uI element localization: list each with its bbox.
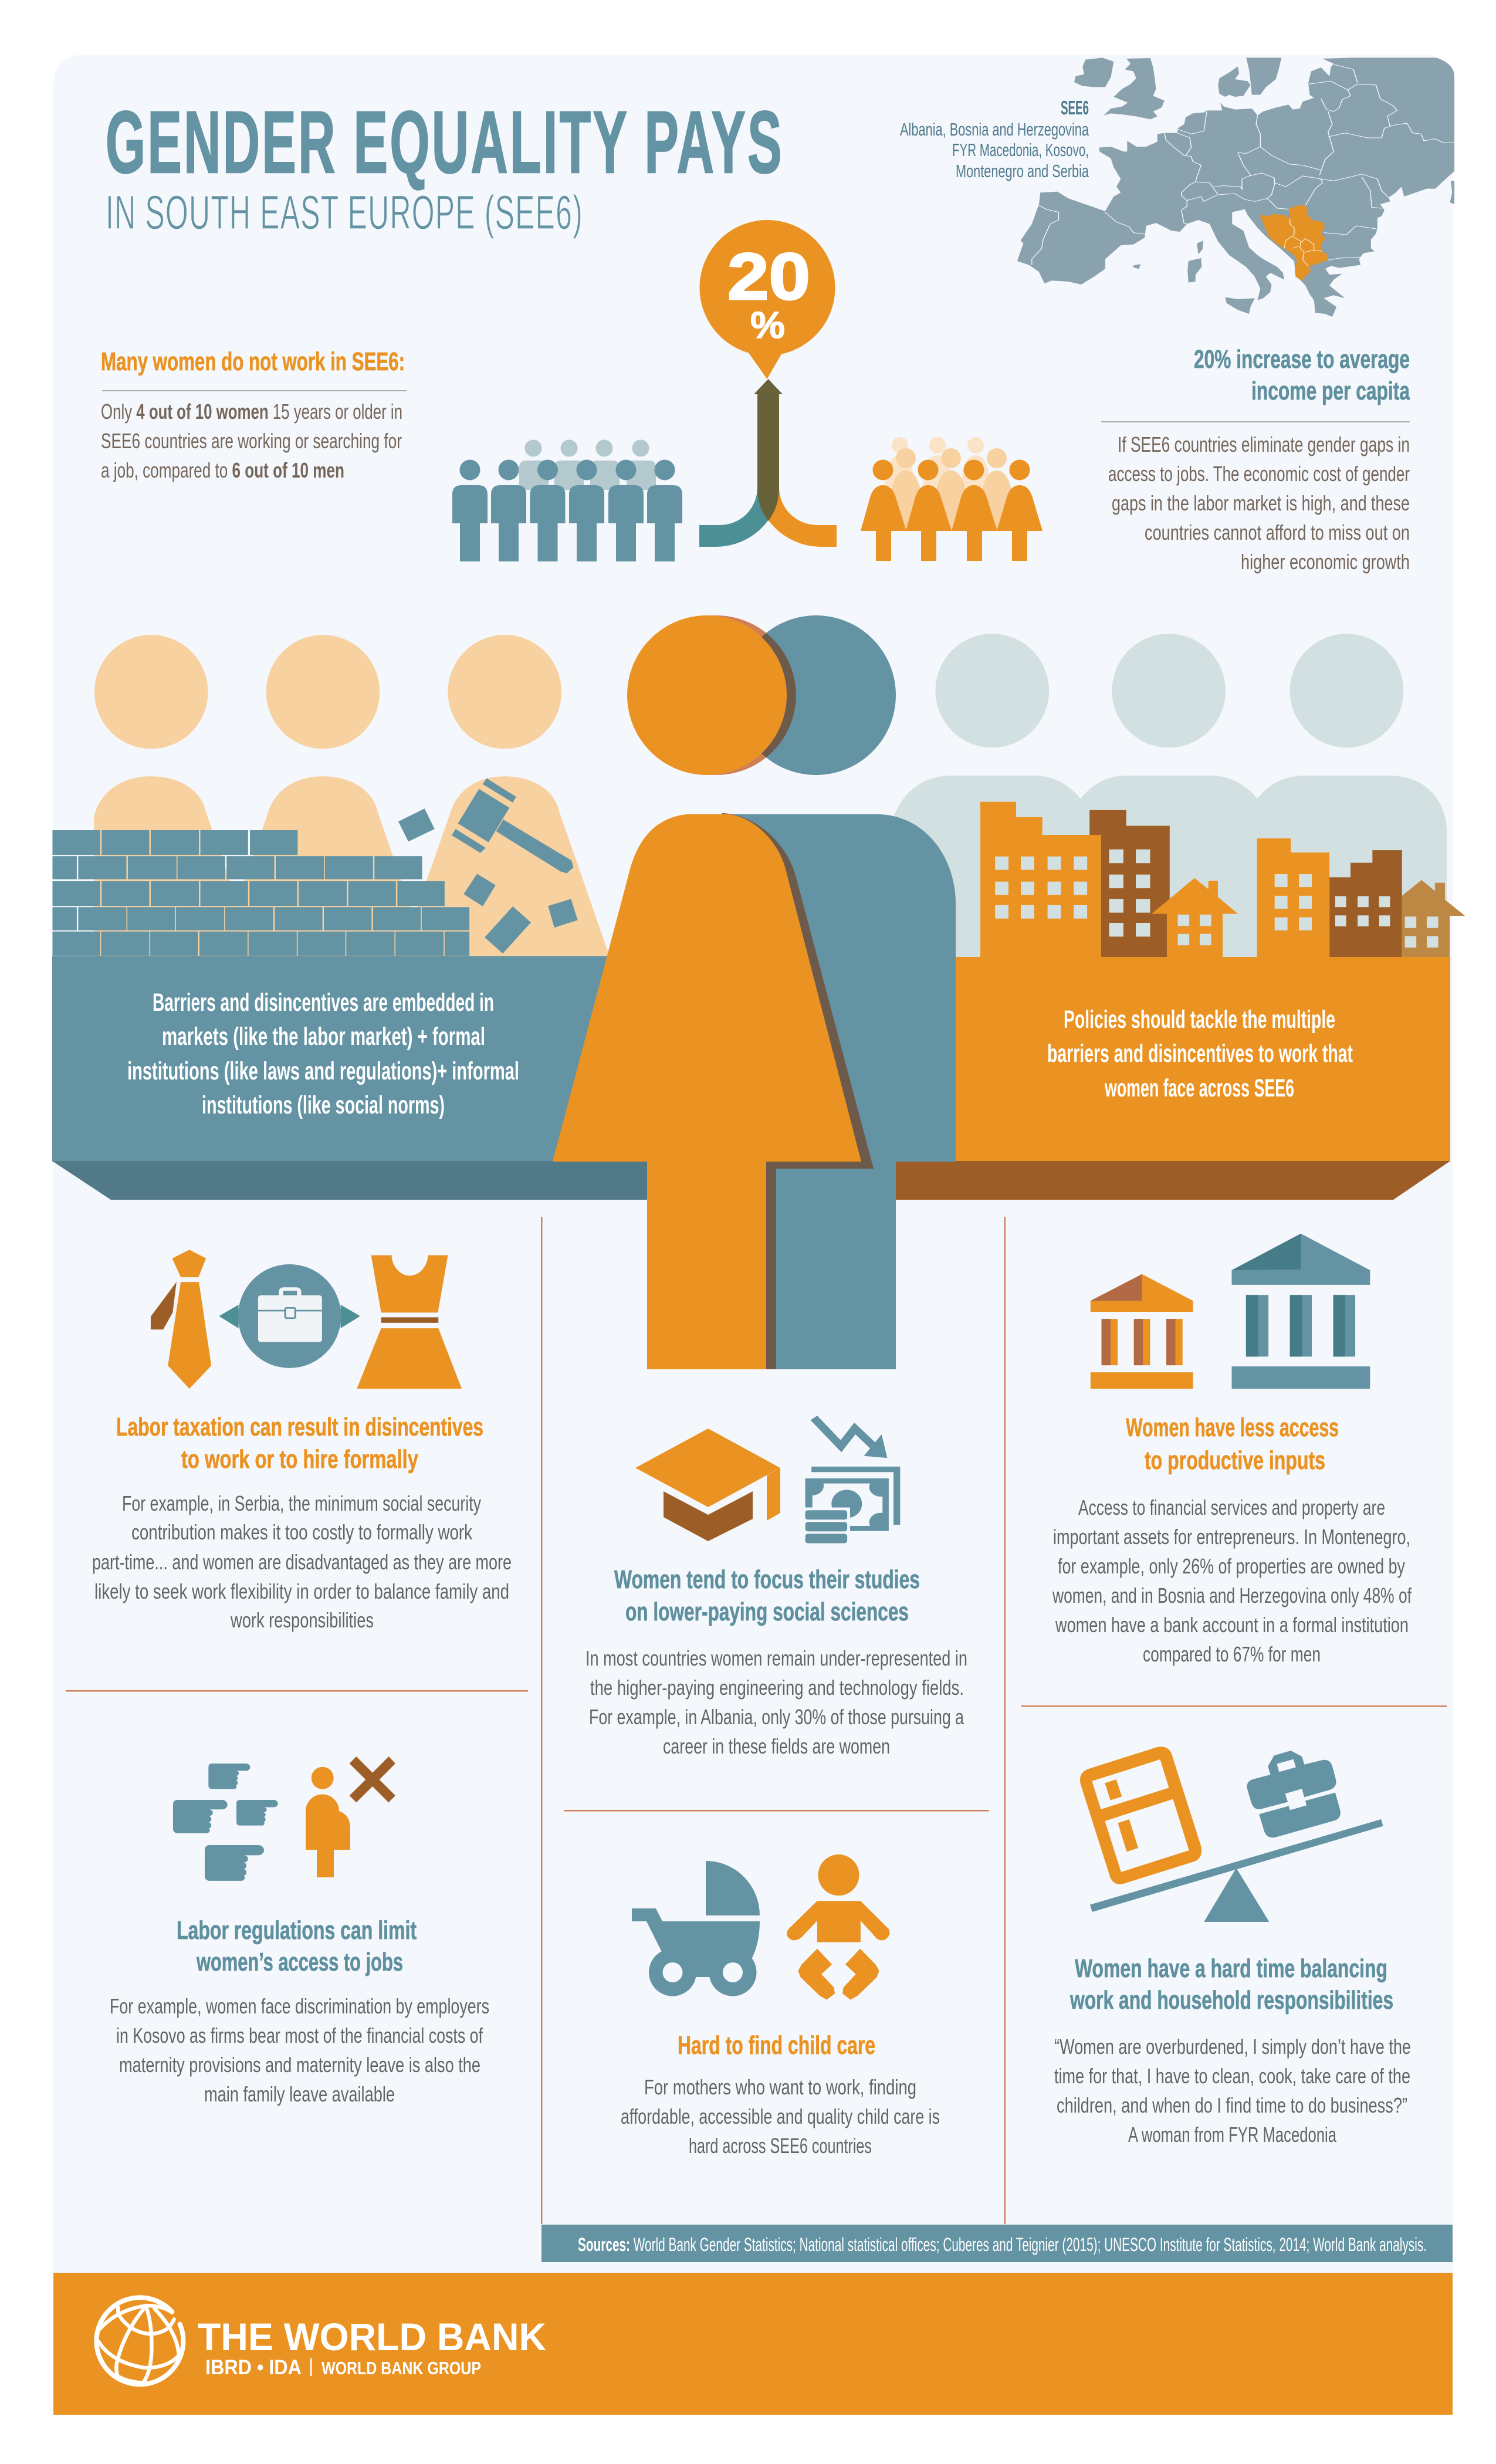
text block: many women do not work <box>101 347 407 482</box>
text: SEE6 country list: Albania, Bosnia and Herzegovina <box>900 119 1089 140</box>
heading: Hard to find child care <box>678 2031 875 2060</box>
footer band <box>53 2273 1453 2415</box>
panel: child care <box>621 1854 940 2158</box>
text block: 20 percent increase <box>1101 345 1410 574</box>
logo wordmark: WORLD BANK GROUP <box>321 2358 481 2378</box>
heading: on lower-paying social sciences <box>625 1597 909 1626</box>
icon: gavel and flying bricks <box>398 779 578 953</box>
text: SEE6 country list <box>900 97 1089 181</box>
quote text <box>1054 2035 1411 2147</box>
text: policies should tackle: Policies should tackle the multiple <box>1064 1006 1335 1034</box>
body text: hard across SEE6 countries <box>689 2134 872 2158</box>
callout: 20 percent pin: % <box>750 304 785 346</box>
icon: fridge and briefcase on seesaw <box>1080 1747 1383 1922</box>
icon: World Bank globe <box>96 2297 183 2384</box>
heading <box>1069 1954 1393 2015</box>
body text <box>1108 432 1410 574</box>
body text <box>585 1646 967 1758</box>
icon: group of women <box>861 437 1043 561</box>
text: policies should tackle: barriers and disincentives to work that <box>1047 1040 1353 1068</box>
men background figures <box>893 634 1447 958</box>
icon: group of men <box>452 440 682 561</box>
icon: brick wall <box>52 830 469 956</box>
body text: compared to 67% for men <box>1143 1642 1321 1666</box>
heading: Many women do not work in SEE6: <box>101 347 405 376</box>
icon: falling money <box>803 1418 900 1546</box>
heading <box>116 1413 483 1474</box>
body text: For example, in Albania, only 30% of those pursuing a <box>589 1705 964 1729</box>
text: barriers and disincentives: Barriers and disincentives are embedded in <box>153 989 494 1017</box>
woman head and body <box>553 615 861 1369</box>
callout: 20 percent pin: 20 <box>727 240 810 313</box>
body text: Only 4 out of 10 women 15 years or older in <box>101 400 402 424</box>
heading <box>1194 345 1410 405</box>
icon: stroller <box>632 1861 760 1996</box>
heading: Labor taxation can result in disincentives <box>116 1413 483 1441</box>
text: SEE6 country list: Montenegro and Serbia <box>956 161 1089 181</box>
quote text: A woman from FYR Macedonia <box>1128 2123 1337 2147</box>
body text <box>110 1994 489 2106</box>
heading: women’s access to jobs <box>196 1948 403 1976</box>
text: barriers and disincentives: institutions (like laws and regulations)+ informal <box>127 1057 519 1085</box>
heading: 20% increase to average <box>1194 345 1410 374</box>
text: barriers and disincentives: markets (like the labor market) + formal <box>162 1023 485 1051</box>
heading: Women have less access <box>1126 1413 1339 1442</box>
body text: For mothers who want to work, finding <box>644 2075 916 2099</box>
text: SEE6 country list: FYR Macedonia, Kosovo, <box>952 140 1089 160</box>
heading: Labor regulations can limit <box>177 1916 417 1945</box>
icon: small and large banks <box>1091 1234 1370 1389</box>
column dividers and section rules <box>66 1217 1447 2224</box>
heading <box>177 1916 417 1976</box>
arrow: merging paths up to 20 percent <box>699 379 837 547</box>
body text: part-time... and women are disadvantaged as they are more <box>92 1550 512 1574</box>
body text: in Kosovo as firms bear most of the financial costs of <box>116 2023 483 2047</box>
body text: main family leave available <box>204 2082 395 2106</box>
icon: tie, briefcase and dress <box>151 1250 462 1389</box>
icon: city skyline <box>980 802 1465 957</box>
title: GENDER EQUALITY PAYS <box>106 93 784 191</box>
body text: For example, in Serbia, the minimum social security <box>122 1491 481 1515</box>
body text: Access to financial services and property are <box>1078 1495 1385 1519</box>
panel: work and household balance <box>1054 1747 1411 2147</box>
panel: labor regulations <box>110 1756 489 2106</box>
text: barriers and disincentives <box>127 989 519 1119</box>
man head and body <box>637 615 956 1369</box>
icon: graduation cap <box>635 1429 780 1541</box>
map: SEE6 countries <box>1260 205 1328 280</box>
body text: SEE6 countries are working or searching for <box>101 429 402 453</box>
body text: countries cannot afford to miss out on <box>1145 520 1410 544</box>
body text: In most countries women remain under-represented in <box>585 1646 967 1670</box>
body text: likely to seek work flexibility in order to balance family and <box>94 1579 509 1603</box>
body text <box>101 400 402 482</box>
panel: labor taxation <box>92 1250 512 1632</box>
text: SEE6 country list: SEE6 <box>1061 97 1089 119</box>
heading: income per capita <box>1251 377 1410 405</box>
subtitle: IN SOUTH EAST EUROPE (SEE6) <box>106 186 583 239</box>
body text: maternity provisions and maternity leave is also the <box>119 2053 480 2077</box>
icon: pointing hands <box>173 1764 278 1881</box>
panel: productive inputs <box>1052 1234 1412 1666</box>
body text: affordable, accessible and quality child care is <box>621 2104 940 2128</box>
heading: to productive inputs <box>1145 1446 1325 1475</box>
logo wordmark: IBRD • IDA <box>205 2356 302 2379</box>
body text: higher economic growth <box>1241 550 1410 574</box>
women background figures <box>94 635 610 957</box>
text: barriers and disincentives: institutions (like social norms) <box>202 1091 445 1119</box>
body text <box>621 2075 940 2158</box>
heading <box>614 1565 920 1626</box>
central figure: man and woman <box>553 615 956 1369</box>
text: policies should tackle <box>1047 1006 1353 1102</box>
map: Europe with SEE6 highlighted <box>1017 57 1454 317</box>
icon: baby <box>787 1854 890 2000</box>
heading <box>1126 1413 1339 1475</box>
heading: to work or to hire formally <box>181 1445 418 1474</box>
body text: contribution makes it too costly to formally work <box>131 1520 473 1544</box>
callout: 20 percent pin <box>699 220 835 379</box>
body text <box>92 1491 512 1632</box>
logo wordmark <box>198 2315 546 2379</box>
body text: the higher-paying engineering and technology fields. <box>590 1676 964 1700</box>
panel: lower-paying studies <box>585 1418 967 1758</box>
text: policies should tackle: women face across SEE6 <box>1104 1074 1294 1102</box>
panel: policies block <box>896 957 1450 1200</box>
sources bar <box>541 2225 1453 2262</box>
panel: barriers block <box>52 956 651 1200</box>
body text: work responsibilities <box>230 1608 374 1632</box>
body text: a job, compared to 6 out of 10 men <box>101 458 344 482</box>
icon: pregnant woman with cross <box>306 1756 395 1877</box>
body text: For example, women face discrimination by employers <box>110 1994 489 2018</box>
heading: Women tend to focus their studies <box>614 1565 920 1594</box>
body text <box>1052 1495 1412 1666</box>
logo wordmark: THE WORLD BANK <box>198 2315 546 2358</box>
body text: career in these fields are women <box>663 1734 890 1758</box>
heading: Women have a hard time balancing <box>1075 1954 1387 1983</box>
